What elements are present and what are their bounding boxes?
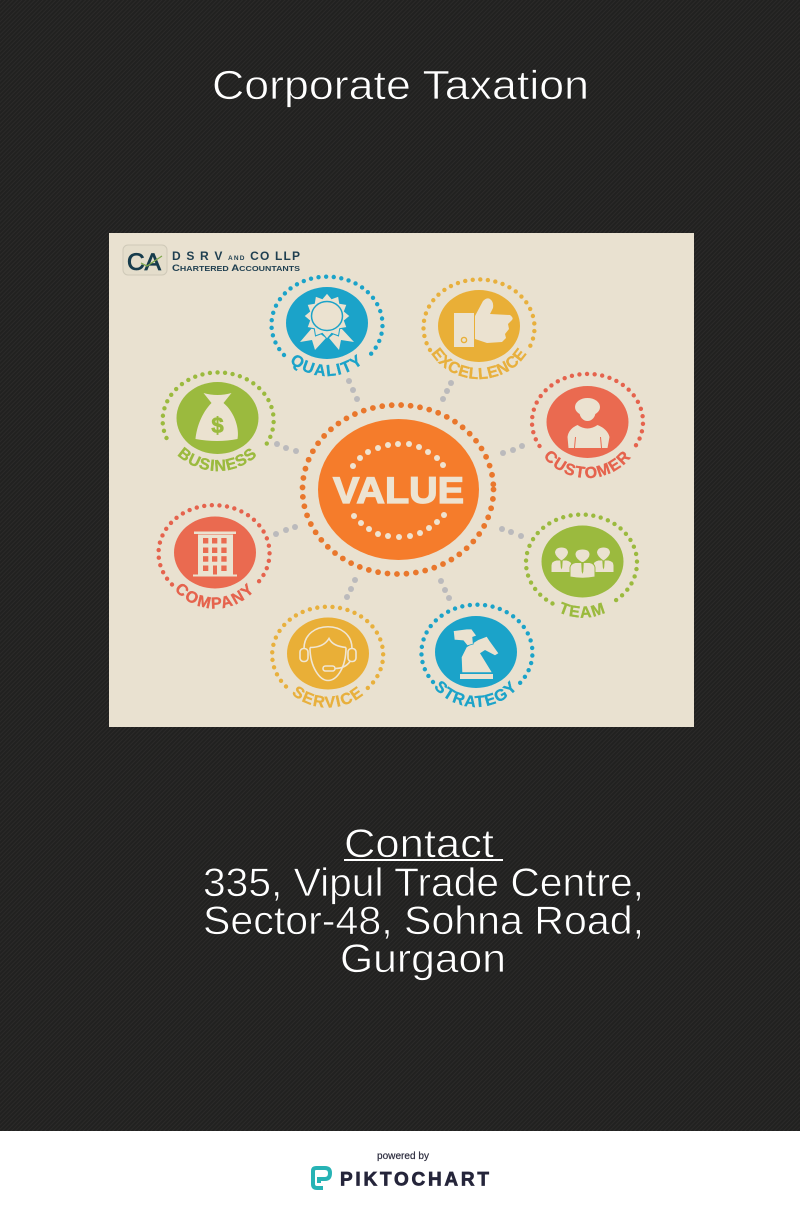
powered by text: powered by [377,1151,429,1162]
icon: building [193,532,237,576]
company logo [123,245,300,276]
image background [109,233,694,727]
team label: TEAM [561,602,605,618]
excellence label: EXCELLENCE [431,347,527,380]
piktochart wordmark: PIKTOCHART [340,1170,489,1190]
title: Corporate Taxation [212,62,589,108]
contact heading: Contact [344,822,494,866]
value dotted ring [302,405,494,574]
service dotted ring [272,607,383,690]
strategy dotted ring [421,605,532,684]
business disc [176,382,258,454]
team dotted ring [526,515,637,604]
icon: headset agent [300,627,356,680]
service label: SERVICE [292,686,364,708]
address line 1: 335, Vipul Trade Centre, [203,861,644,905]
footer band [0,1131,800,1211]
node: business [160,370,276,472]
value inner dots [350,441,447,540]
company disc [174,516,256,588]
quality label: QUALITY [292,354,360,376]
node: strategy [419,602,534,708]
logo badge [123,245,167,275]
service disc [287,618,369,690]
logo firm name: D S R V AND CO LLP [172,249,300,263]
node: service [270,604,386,708]
panel: value diagram image [109,233,694,727]
customer dotted ring [532,374,643,446]
customer label: CUSTOMER [545,451,632,478]
footer background [0,1131,800,1211]
business label: BUSINESS [178,446,256,472]
company dotted ring [159,505,270,584]
icon: rosette [300,293,354,350]
node: excellence [421,277,536,380]
icon: chess knight and hand [453,629,498,679]
logo subtitle: CHARTERED ACCOUNTANTS [172,263,300,273]
address line 2: Sector-48, Sohna Road, [203,899,644,943]
strategy disc [435,616,517,688]
logo check mark [141,256,162,266]
icon: three people [552,548,614,578]
team disc [542,526,624,598]
node: quality [269,274,385,376]
node: team [524,512,640,618]
quality dotted ring [272,277,382,355]
central value node [302,405,494,574]
value label: VALUE [333,470,464,511]
icon: piktochart logo [313,1168,330,1188]
logo CA letters: CA [127,249,161,276]
value disc [318,419,479,560]
address line 3: Gurgaon [340,937,506,981]
contact underline [344,859,503,861]
connector dots [273,378,525,601]
quality disc [286,287,368,359]
contact block [203,822,644,981]
icon: money bag: $ [211,413,224,438]
business dotted ring [163,372,274,444]
company label: COMPANY [176,582,252,609]
node: company [156,503,272,609]
node: customer [530,372,646,478]
icon: person [568,398,610,448]
icon: thumbs up [454,298,513,347]
strategy label: STRATEGY [435,680,515,708]
customer disc [546,386,628,458]
excellence dotted ring [424,279,534,350]
excellence disc [438,290,520,362]
